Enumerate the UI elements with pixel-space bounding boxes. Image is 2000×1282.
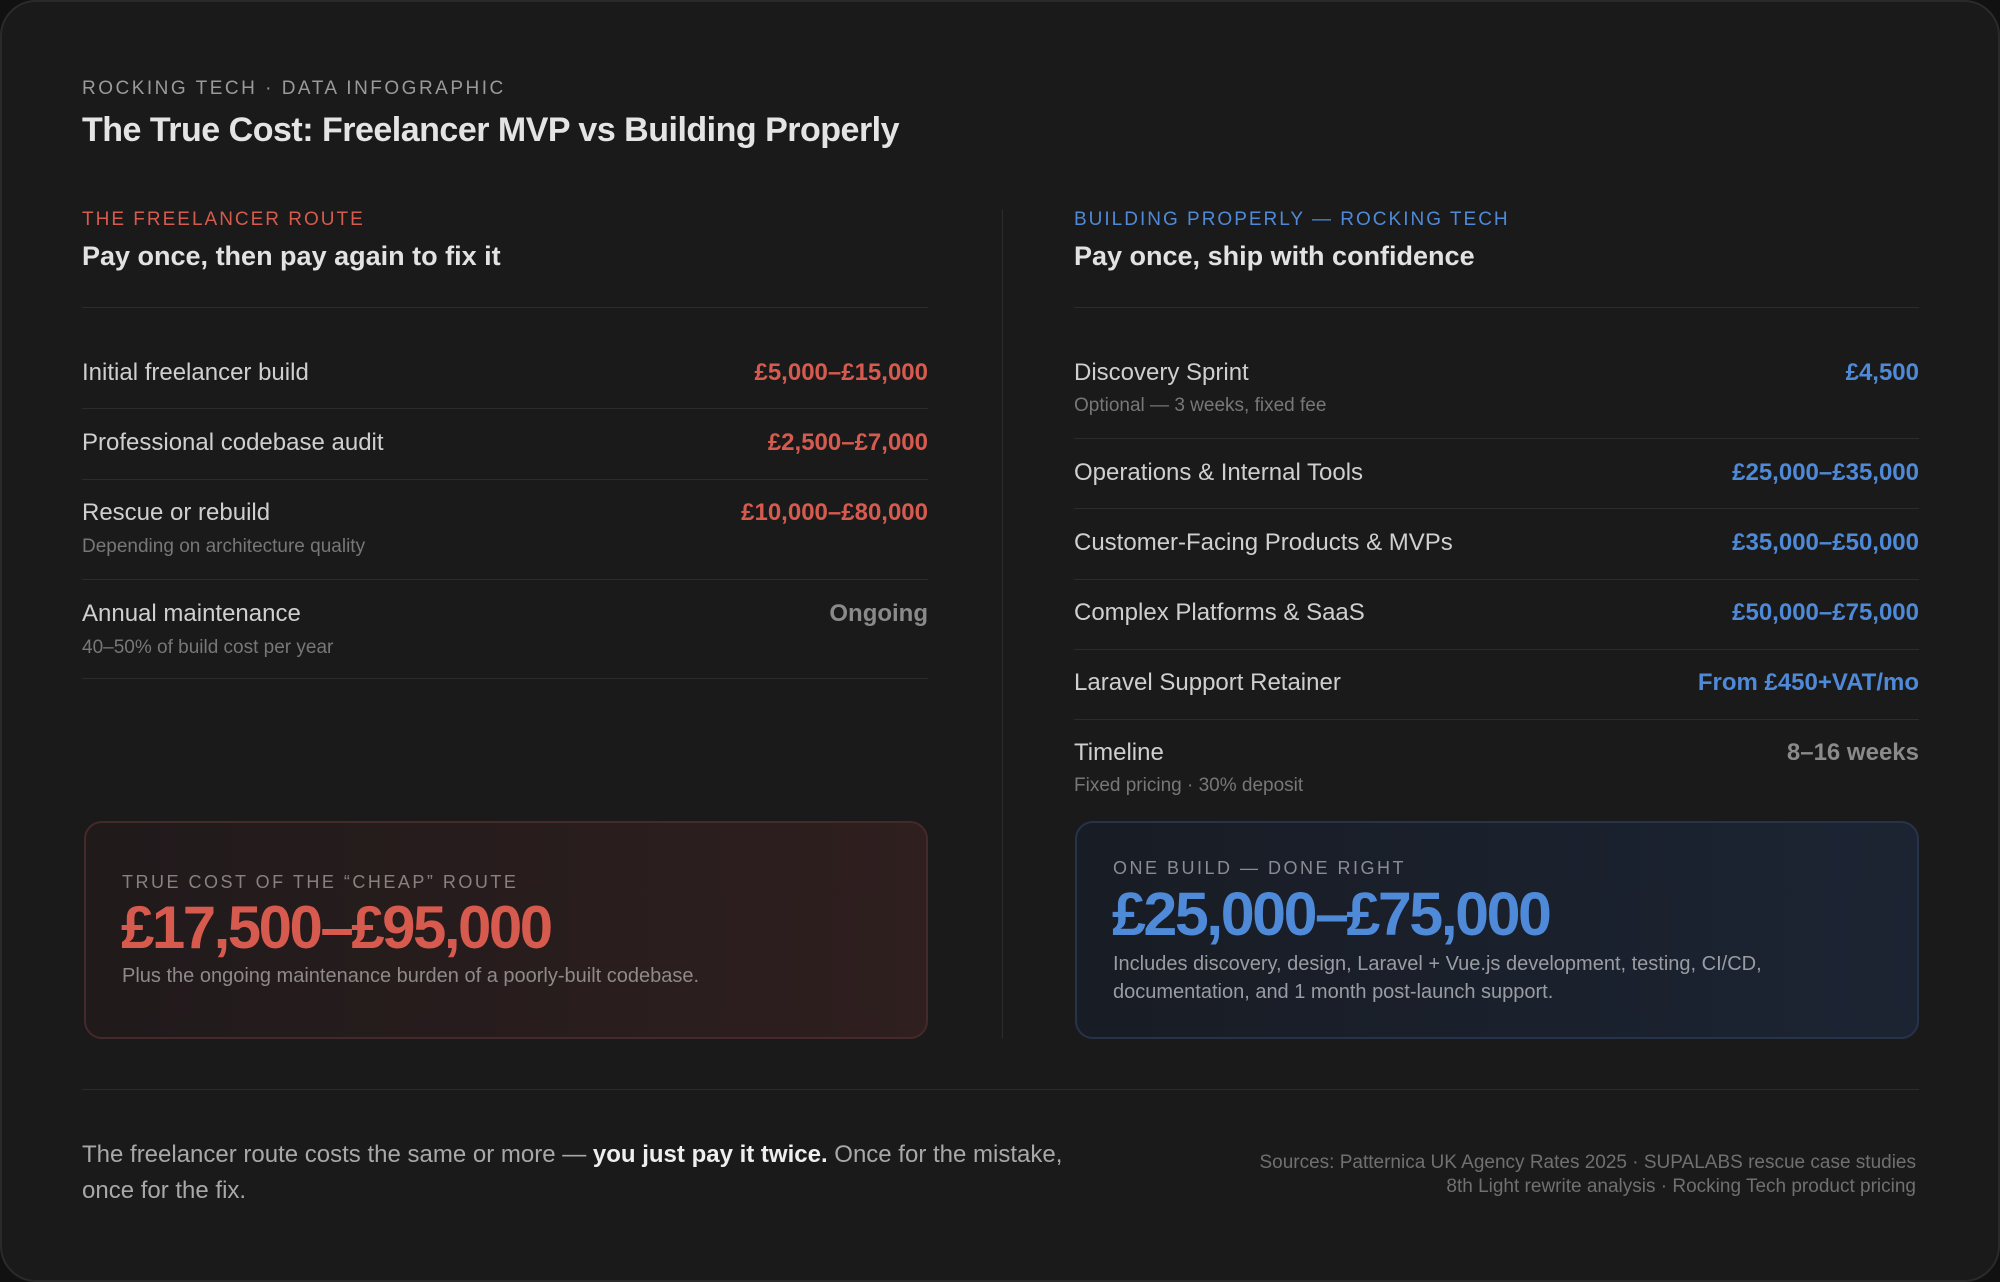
row: initial build: £5,000–£15,000: [754, 359, 928, 386]
row: retainer: From £450+VAT/mo: [1698, 669, 1919, 696]
row: complex: £50,000–£75,000: [1732, 599, 1919, 626]
sources: Sources: Patternica UK Agency Rates 2025 · SUPALABS rescue case studies: [1259, 1152, 1916, 1173]
row: audit: [82, 429, 928, 456]
row: rescue: Depending on architecture quality: [82, 536, 365, 557]
row: timeline: 8–16 weeks: [1787, 739, 1919, 766]
row: customer: [1074, 529, 1919, 556]
footer conclusion: The freelancer route costs the same or more — you just pay it twice. Once for the mistake, once for the fix.: [82, 1141, 1062, 1204]
callout: true cost: [84, 821, 928, 1039]
row: ops: £25,000–£35,000: [1732, 459, 1919, 486]
callout: true cost: Plus the ongoing maintenance burden of a poorly-built codebase.: [122, 965, 699, 987]
row: customer: Customer-Facing Products & MVPs: [1074, 529, 1453, 556]
row: maintenance: [82, 600, 928, 658]
row: audit: Professional codebase audit: [82, 429, 384, 456]
section heading: Pay once, then pay again to fix it: [82, 241, 501, 271]
big number: £17,500–£95,000: [121, 894, 551, 961]
row: discovery: £4,500: [1846, 359, 1919, 386]
eyebrow: ROCKING TECH · DATA INFOGRAPHIC: [82, 78, 506, 99]
row: timeline: [1074, 739, 1919, 796]
row: maintenance: Annual maintenance: [82, 600, 301, 627]
row: rescue: £10,000–£80,000: [741, 499, 928, 526]
panel: building properly: [1074, 209, 1919, 1039]
panel: freelancer route: [82, 209, 928, 1039]
row: discovery: Optional — 3 weeks, fixed fee: [1074, 395, 1326, 416]
callout: one build: ONE BUILD — DONE RIGHT: [1113, 858, 1406, 878]
divider: [1002, 210, 1003, 1038]
row: complex: Complex Platforms & SaaS: [1074, 599, 1365, 626]
row: discovery: [1074, 359, 1919, 416]
section label: BUILDING PROPERLY — ROCKING TECH: [1074, 209, 1510, 230]
row: maintenance: 40–50% of build cost per year: [82, 637, 333, 658]
big number: £25,000–£75,000: [1112, 880, 1549, 948]
callout: true cost: TRUE COST OF THE “CHEAP” ROUTE: [122, 872, 518, 892]
sources: [1259, 1152, 1916, 1197]
row: rescue: [82, 499, 928, 557]
row: timeline: Timeline: [1074, 739, 1164, 766]
callout: one build: Includes discovery, design, Laravel + Vue.js development, testing, CI/CD, documentation, and 1 month post-launch support.: [1113, 953, 1762, 1003]
row: initial build: [82, 359, 928, 386]
row: ops: [1074, 459, 1919, 486]
row: audit: £2,500–£7,000: [768, 429, 928, 456]
section label: THE FREELANCER ROUTE: [82, 209, 365, 230]
row: retainer: Laravel Support Retainer: [1074, 669, 1341, 696]
row: discovery: Discovery Sprint: [1074, 359, 1249, 386]
row: customer: £35,000–£50,000: [1732, 529, 1919, 556]
section heading: Pay once, ship with confidence: [1074, 241, 1475, 271]
row: retainer: [1074, 669, 1919, 696]
row: maintenance: Ongoing: [829, 600, 928, 627]
row: complex: [1074, 599, 1919, 626]
row: ops: Operations & Internal Tools: [1074, 459, 1363, 486]
callout: one build: [1075, 821, 1919, 1039]
row: initial build: Initial freelancer build: [82, 359, 309, 386]
title: The True Cost: Freelancer MVP vs Building Properly: [82, 111, 899, 149]
row: timeline: Fixed pricing · 30% deposit: [1074, 775, 1303, 796]
row: rescue: Rescue or rebuild: [82, 499, 270, 526]
sources: 8th Light rewrite analysis · Rocking Tech product pricing: [1446, 1176, 1916, 1197]
